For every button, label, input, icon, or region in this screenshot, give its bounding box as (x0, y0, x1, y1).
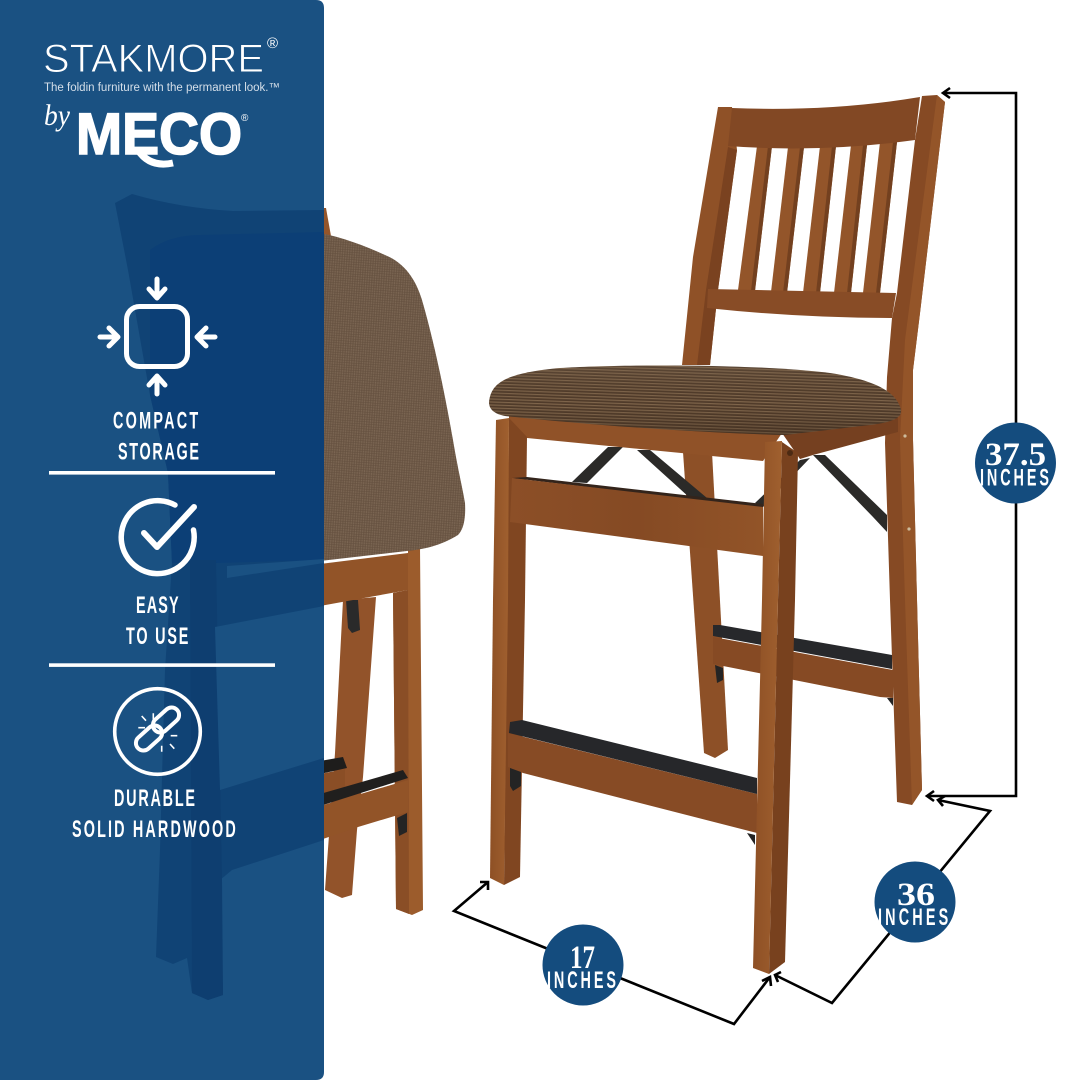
folded chair behind panel (320, 208, 465, 915)
dimension: depth arrow (775, 796, 990, 1003)
badge: 37.5 inches: 37.5 (985, 437, 1046, 473)
main chair (485, 95, 945, 974)
ghost: leg shade (190, 560, 223, 1000)
chair: lower front rail black strip (509, 720, 757, 794)
chair: right upright light face (900, 95, 945, 805)
feature: durable solid hardwood (72, 689, 236, 843)
chair: right upright and back leg (885, 95, 945, 805)
dimension: height arrow (927, 88, 1016, 801)
chair: seat cushion (489, 366, 901, 435)
chair: back slats (738, 142, 897, 293)
chair: back foot rail wood (713, 637, 893, 698)
folded chair: upper frame stub (322, 208, 331, 236)
badge: 17 inches (542, 924, 624, 1006)
logo: Meco registered mark: ® (241, 113, 249, 124)
chair: front-right leg inner face (769, 442, 798, 974)
logo: Stakmore wordmark: STAKMORE (43, 37, 264, 81)
chair: front-left leg outer face (490, 418, 509, 885)
icon: compact square with arrows (100, 279, 215, 394)
logo: Meco wordmark: MECO (76, 102, 242, 167)
ghost: cushion shade (150, 232, 324, 563)
logo: Meco swoosh (138, 150, 173, 164)
badge: 36 inches: INCHES (878, 904, 948, 931)
label: durable: DURABLE (114, 785, 195, 812)
badge: 37.5 inches: INCHES (980, 465, 1049, 492)
chair: back foot rail black strip (713, 625, 892, 669)
chair: front apron (509, 416, 782, 461)
chair: rivets (903, 434, 911, 531)
chair: front-left leg inner face (504, 418, 527, 885)
chair: left upright (682, 107, 737, 365)
folded chair: main foot rail black top (320, 770, 408, 806)
folded chair: upper foot rail (320, 757, 347, 774)
label: to use: TO USE (126, 623, 188, 650)
chair: upper cross rail dark edge (512, 477, 763, 508)
feature: easy to use (121, 501, 194, 650)
badge: 17 inches: 17 (570, 940, 595, 976)
divider line two (49, 663, 275, 667)
chair: lower front rail wood (508, 733, 757, 833)
chair: back-left leg (683, 452, 728, 758)
chair: upper cross rail (510, 478, 763, 556)
panel background (0, 0, 324, 1080)
blue side panel (0, 0, 324, 1080)
label: compact: COMPACT (113, 408, 198, 435)
label: storage: STORAGE (118, 439, 199, 466)
label: easy: EASY (136, 592, 179, 619)
badge: 17 inches: INCHES (547, 967, 616, 994)
icon: chain link in circle (115, 689, 200, 774)
folded chair: front upright (393, 547, 423, 915)
logo: tagline: The foldin furniture with the permanent look.™ (44, 82, 280, 94)
badge: 36 inches (874, 862, 956, 942)
chair: back foot bracket (715, 665, 893, 706)
chair: lower brackets (510, 768, 755, 845)
folded chair: back leg (325, 597, 376, 898)
badge: 36 inches: 36 (897, 877, 935, 913)
logo: by: by (44, 99, 71, 132)
folded chair: foot rail wood stub (320, 769, 345, 796)
chair: leg pivot hole (787, 450, 793, 456)
chair: front-right leg outer face (753, 441, 782, 974)
brand logo (43, 35, 280, 167)
chair: metal hinge strips (572, 447, 887, 532)
folded chair: seat cushion (320, 233, 465, 561)
badge: 37.5 inches (975, 422, 1056, 504)
folded chair: upright shaded face (393, 590, 409, 914)
ghost: frame window (215, 606, 324, 790)
chair: lower back rail (707, 289, 896, 318)
ghost: seat sliver (227, 559, 324, 578)
folded chair: main foot rail wood (320, 780, 408, 840)
ghost of folded chair (115, 194, 324, 1000)
dimension: width arrow (454, 882, 771, 1024)
label: solid hardwood: SOLID HARDWOOD (72, 816, 236, 843)
folded chair: apron (320, 553, 408, 606)
divider line one (49, 471, 275, 475)
folded chair: lower bracket (397, 813, 407, 836)
chair: left upright inner shade (697, 147, 737, 365)
chair: side apron (782, 417, 898, 459)
folded chair: hinge bracket (346, 600, 360, 633)
icon: check circle (121, 501, 194, 574)
chair: slat shaded edges (751, 142, 897, 293)
chair: top rail (728, 97, 920, 148)
logo: registered mark: ® (267, 35, 278, 52)
feature: compact storage (100, 279, 215, 466)
